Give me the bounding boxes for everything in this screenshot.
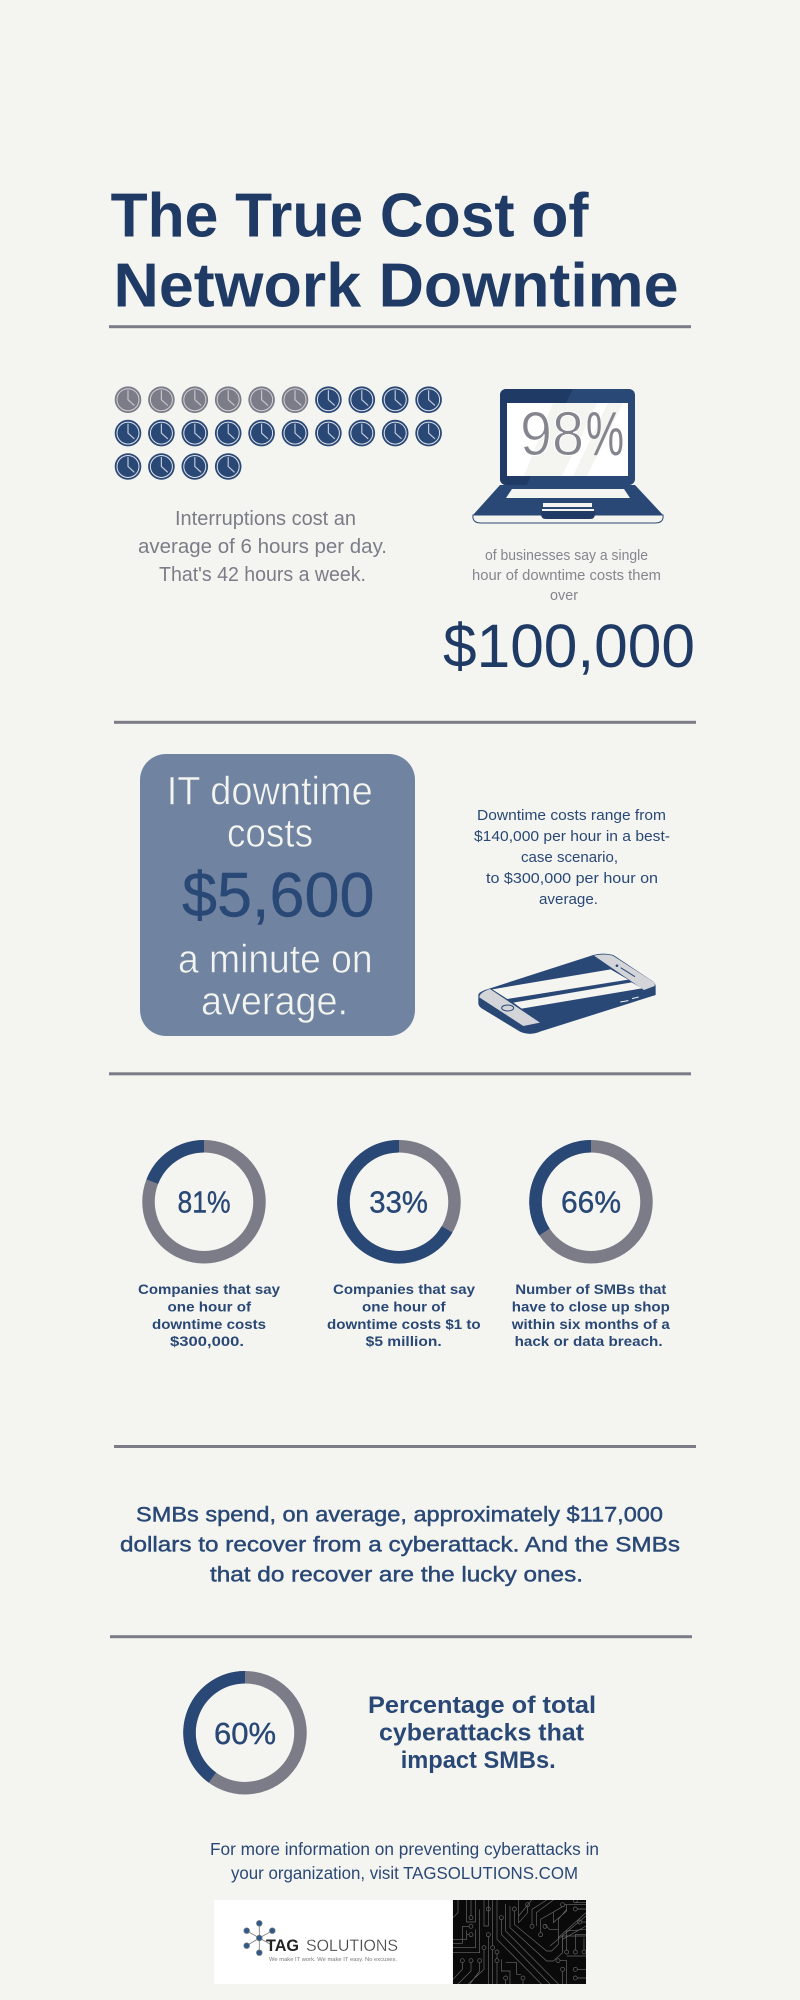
stat: $5,600: $5,600 [182, 861, 374, 931]
text: more information: For more information on preventing cyberattacks in [210, 1839, 599, 1859]
logo: TAG Solutions: TAG [266, 1936, 299, 1955]
caption: 66%: within six months of a [511, 1317, 670, 1332]
text: more information [210, 1839, 599, 1883]
logo: TAG Solutions [214, 1900, 452, 1984]
text: SMB recovery cost [120, 1503, 680, 1587]
text: businesses say [472, 547, 661, 604]
icon grid: clocks, 6 grey and 18 blue [115, 386, 442, 480]
text: businesses say: hour of downtime costs them [472, 567, 661, 584]
text: downtime cost range: $140,000 per hour in a best- [474, 828, 670, 845]
text: more information: your organization, visit TAGSOLUTIONS.COM [231, 1863, 578, 1883]
text: interruptions cost [138, 508, 387, 586]
caption: 33%: $5 million. [366, 1334, 442, 1349]
caption: 66% [511, 1282, 670, 1349]
donut chart: 81% [148, 1146, 260, 1257]
caption: 81%: one hour of [168, 1300, 252, 1315]
98% stat [520, 400, 624, 469]
text: businesses say: over [550, 587, 578, 604]
image: circuit board [453, 1899, 586, 1991]
title: The True Cost of [111, 182, 589, 251]
caption: 66%: hack or data breach. [515, 1334, 663, 1349]
text: downtime cost range: Downtime costs range from [477, 807, 666, 824]
text: downtime cost range: to $300,000 per hour on [486, 870, 658, 887]
panel text: average. [201, 979, 348, 1023]
98% stat: 98 [520, 400, 584, 469]
icon: smartphone [478, 954, 656, 1034]
caption: 33%: Companies that say [333, 1282, 476, 1297]
text: interruptions cost: average of 6 hours per day. [138, 536, 387, 558]
donut chart: 81%: 81% [178, 1185, 230, 1220]
title [111, 182, 679, 321]
text: SMB recovery cost: SMBs spend, on average, approximately $117,000 [136, 1503, 663, 1527]
icon: network nodes [244, 1920, 275, 1955]
text: downtime cost range: case scenario, [521, 849, 618, 866]
logo: TAG Solutions: SOLUTIONS [306, 1936, 398, 1955]
donut chart: 33% [343, 1146, 454, 1257]
donut chart: 66% [535, 1146, 646, 1257]
panel text [167, 769, 373, 1023]
text: downtime cost range [474, 807, 670, 908]
icon: laptop with 98% [473, 389, 663, 523]
caption: 66%: Number of SMBs that [515, 1282, 667, 1297]
panel: IT downtime cost per minute [140, 754, 415, 1036]
donut chart: 66%: 66% [561, 1185, 621, 1220]
donut chart: 33%: 33% [369, 1185, 428, 1220]
logo: TAG Solutions: We make IT work. We make IT easy. No excuses. [269, 1957, 397, 1963]
caption: 66%: have to close up shop [512, 1300, 670, 1315]
text: downtime cost range: average. [539, 891, 598, 908]
text: percentage of cyberattacks: Percentage of total [368, 1692, 596, 1719]
text: businesses say: of businesses say a single [485, 547, 648, 564]
caption: 81% [138, 1282, 281, 1349]
text: percentage of cyberattacks: impact SMBs. [401, 1747, 556, 1774]
caption: 81%: downtime costs [152, 1317, 266, 1332]
text: percentage of cyberattacks: cyberattacks that [379, 1720, 584, 1747]
title: Network Downtime [114, 252, 678, 321]
text: percentage of cyberattacks [368, 1692, 596, 1774]
caption: 81%: Companies that say [138, 1282, 281, 1297]
panel text: a minute on [178, 937, 373, 981]
panel text: costs [227, 812, 313, 856]
donut chart: 60% [190, 1677, 300, 1788]
caption: 33% [327, 1282, 481, 1349]
caption: 33%: downtime costs $1 to [327, 1317, 481, 1332]
text: interruptions cost: That's 42 hours a week. [159, 564, 366, 586]
text: SMB recovery cost: that do recover are the lucky ones. [210, 1563, 583, 1587]
donut chart: 60%: 60% [214, 1716, 276, 1751]
text: SMB recovery cost: dollars to recover from a cyberattack. And the SMBs [120, 1533, 680, 1557]
text: interruptions cost: Interruptions cost an [175, 508, 356, 530]
stat: $100,000: $100,000 [443, 612, 695, 680]
98% stat: % [586, 400, 624, 469]
panel text: IT downtime [167, 769, 373, 813]
caption: 33%: one hour of [362, 1300, 446, 1315]
caption: 81%: $300,000. [170, 1334, 244, 1349]
